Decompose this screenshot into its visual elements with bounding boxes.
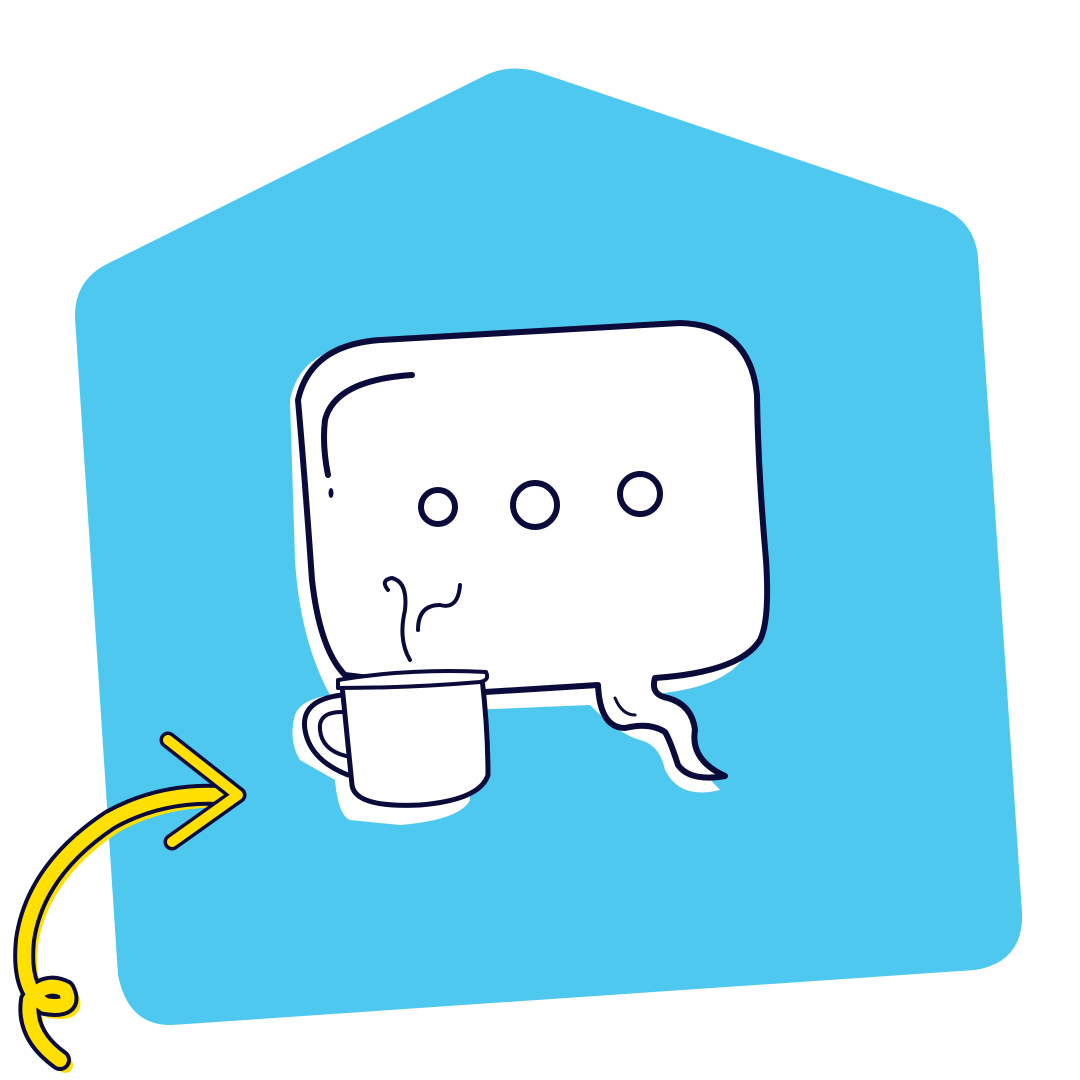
mug handle: [304, 695, 348, 775]
icon: speech bubble with mug: [290, 323, 767, 825]
three dots: [421, 490, 455, 524]
mug body: [342, 678, 488, 805]
steam: [385, 578, 410, 660]
bubble body: [298, 323, 767, 778]
mug rim: [338, 671, 487, 688]
tail inner curl: [615, 698, 635, 715]
arrow: yellow curled arrow: [24, 740, 238, 1065]
inner highlight curve: [324, 375, 412, 475]
panel: blue pentagon background: [75, 68, 1022, 1025]
bubble shadow: [290, 330, 752, 825]
